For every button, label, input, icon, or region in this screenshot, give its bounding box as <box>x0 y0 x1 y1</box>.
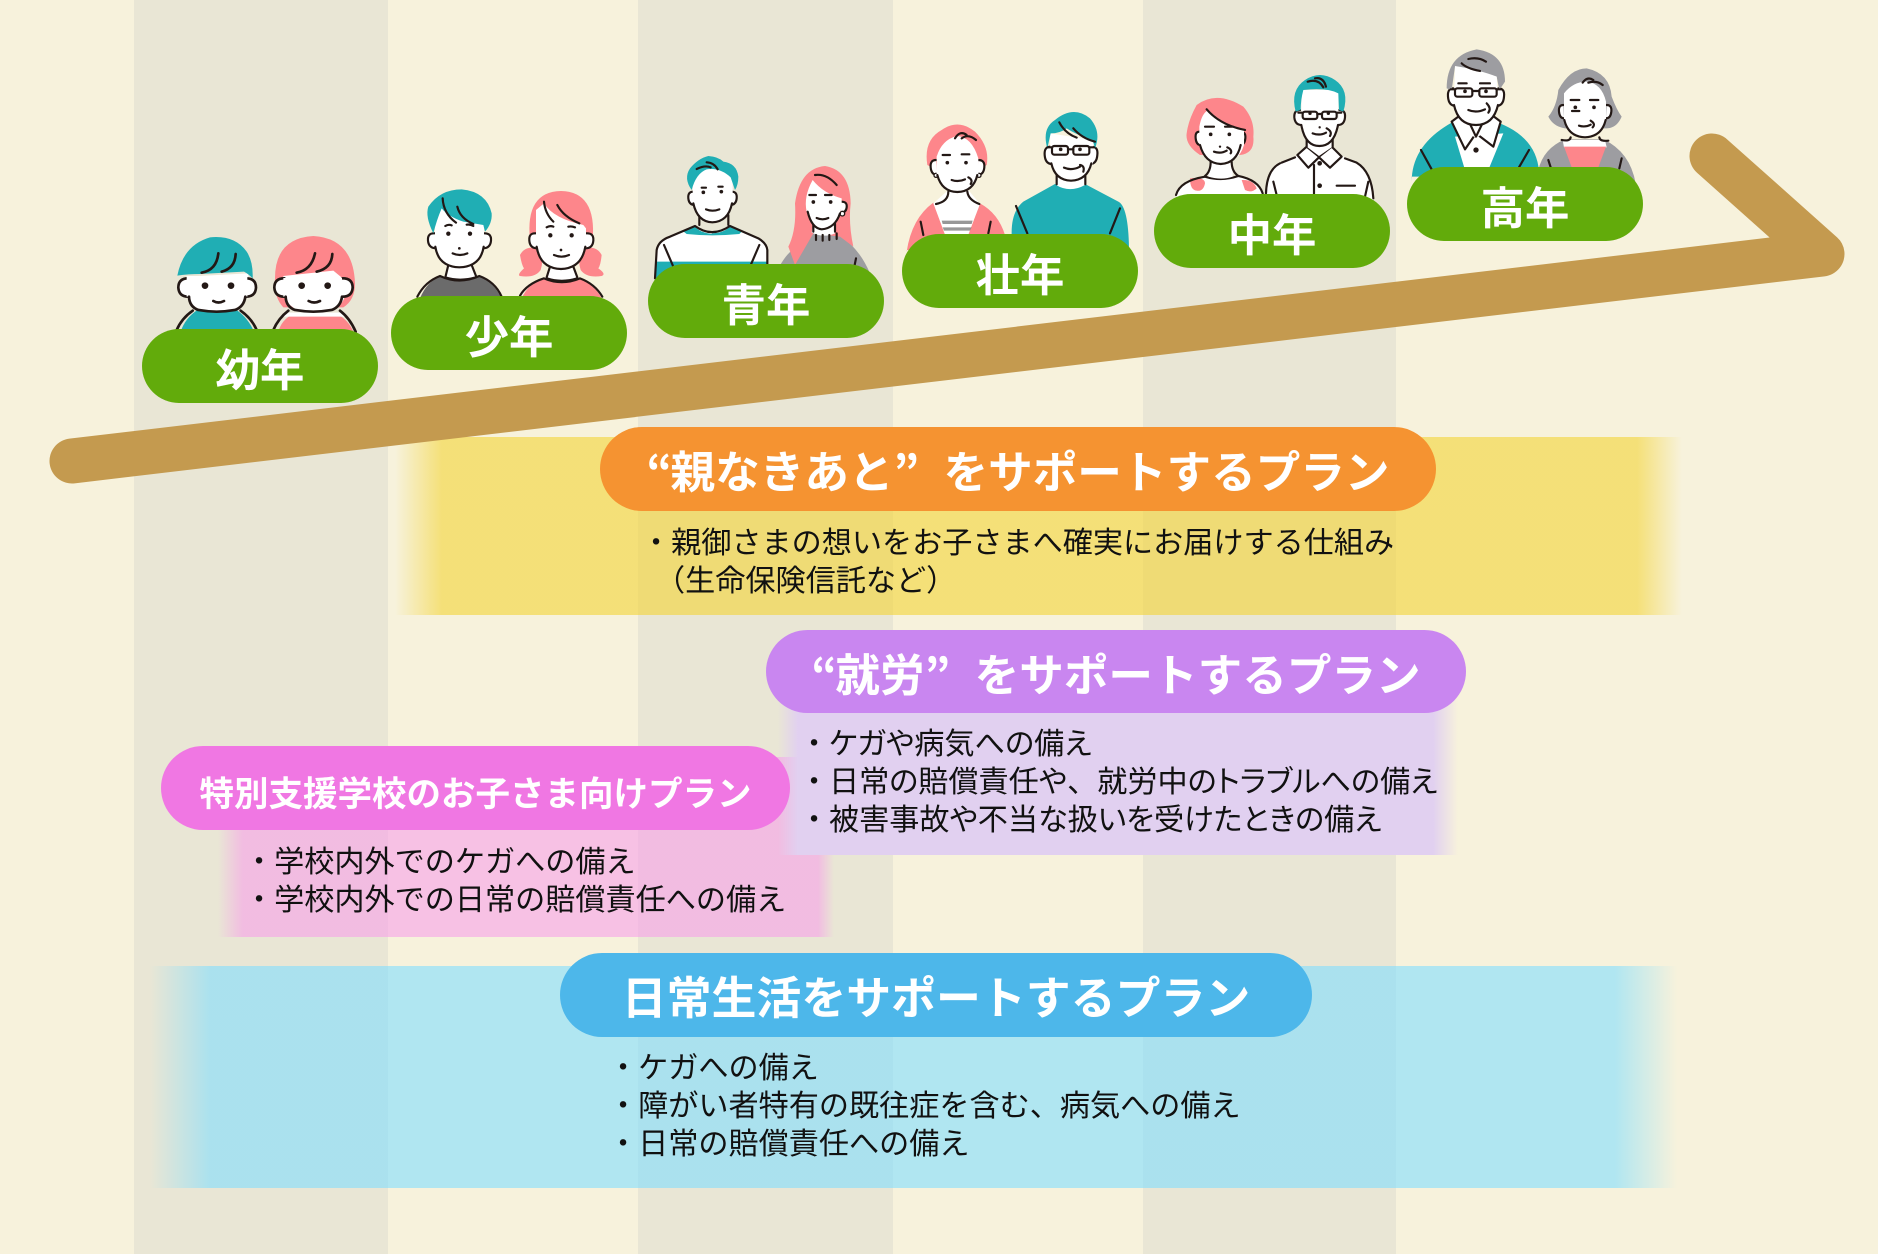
heading: orange plan: ” <box>894 436 919 501</box>
icon: elderly woman <box>1538 68 1636 183</box>
icon: young man <box>655 156 767 282</box>
label: 幼年: 幼年 <box>216 334 304 398</box>
icon: adult woman <box>907 125 1005 252</box>
text: purple plan details: ・ <box>799 795 829 839</box>
text: purple plan details <box>799 719 1437 839</box>
text: purple plan details: ケガや病気への備え <box>829 719 1092 763</box>
icon: infant boy <box>177 237 257 332</box>
background stripe: 1 <box>134 0 388 1254</box>
text: orange plan details: ・親御さまの想いをお子さまへ確実にお届けする仕組み <box>641 518 1394 562</box>
label: 中年: 中年 <box>1228 198 1316 264</box>
label: 青年 <box>648 264 884 338</box>
heading: blue plan: 日常生活をサポートするプラン <box>622 962 1250 1027</box>
label: 少年 <box>391 296 627 370</box>
icon: middle-aged woman <box>1176 98 1264 197</box>
arrow: life stage timeline <box>72 156 1822 461</box>
panel: blue band <box>150 966 1677 1188</box>
text: blue plan details <box>608 1043 1241 1163</box>
icon: elderly man <box>1412 49 1539 182</box>
text: pink plan details <box>244 837 786 919</box>
text: purple plan details: 日常の賠償責任や、就労中のトラブルへの備え <box>829 757 1437 801</box>
heading: purple plan <box>766 630 1466 713</box>
label: 少年: 少年 <box>465 300 553 366</box>
heading: blue plan <box>560 953 1312 1037</box>
label: 幼年 <box>142 329 378 403</box>
icon: boy <box>417 189 502 298</box>
heading: purple plan: 就労 をサポートするプラン <box>835 639 1421 704</box>
icon: middle-aged man <box>1266 75 1373 200</box>
text: purple plan details: 被害事故や不当な扱いを受けたときの備え <box>829 795 1382 839</box>
label: 青年: 青年 <box>722 268 810 334</box>
heading: pink plan: 特別支援学校のお子さま向けプラン <box>200 766 752 816</box>
icon: adult man with glasses <box>1012 112 1129 248</box>
heading: pink plan <box>161 746 790 830</box>
heading: orange plan: 親なきあと をサポートするプラン <box>671 436 1389 501</box>
background stripe: 3 <box>1143 0 1396 1254</box>
heading: purple plan: “ <box>811 639 837 704</box>
heading: orange plan <box>600 427 1436 511</box>
text: pink plan details: ・学校内外でのケガへの備え <box>244 837 636 881</box>
background stripe: 2 <box>638 0 893 1254</box>
text: blue plan details: ・日常の賠償責任への備え <box>608 1119 970 1163</box>
heading: purple plan: ” <box>925 639 950 704</box>
label: 高年 <box>1407 167 1643 241</box>
label: 高年: 高年 <box>1481 172 1569 236</box>
panel: yellow band <box>395 437 1682 615</box>
icon: young woman <box>779 166 870 273</box>
label: 壮年: 壮年 <box>976 238 1064 304</box>
panel: purple band <box>778 641 1458 855</box>
text: purple plan details: ・ <box>799 719 829 763</box>
icon: girl <box>519 191 604 298</box>
label: 中年 <box>1154 194 1390 268</box>
text: purple plan details: ・ <box>799 757 829 801</box>
label: 壮年 <box>902 234 1138 308</box>
text: pink plan details: ・学校内外での日常の賠償責任への備え <box>244 875 786 919</box>
panel: pink band <box>218 757 834 937</box>
text: orange plan details: （生命保険信託など） <box>655 556 956 600</box>
text: blue plan details: ・障がい者特有の既往症を含む、病気への備え <box>608 1081 1241 1125</box>
heading: orange plan: “ <box>647 436 672 501</box>
text: blue plan details: ・ケガへの備え <box>608 1043 819 1087</box>
icon: infant girl <box>273 236 356 332</box>
text: orange plan details <box>641 518 1394 600</box>
